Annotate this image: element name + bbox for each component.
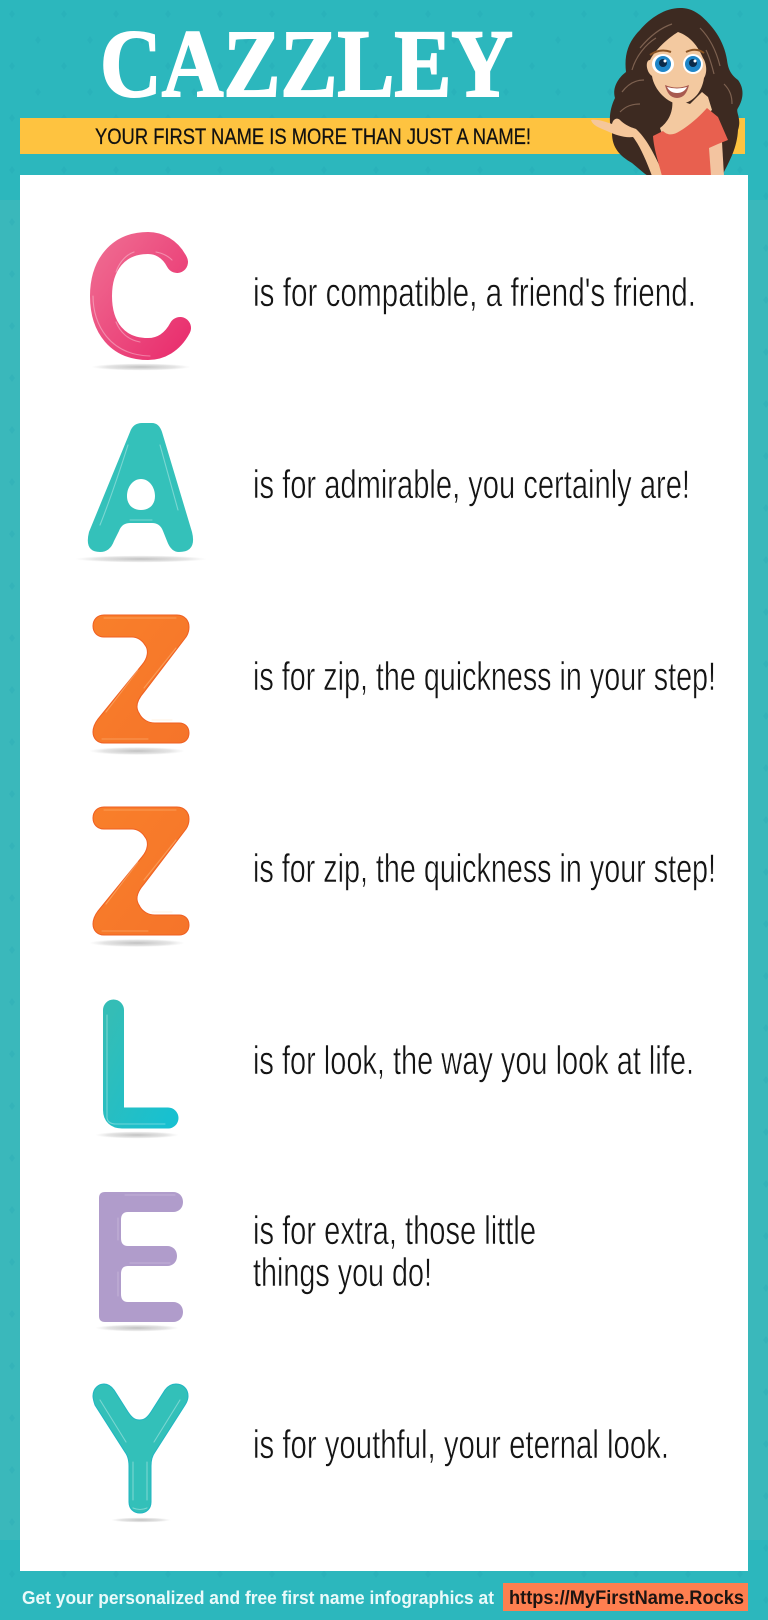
subtitle banner: YOUR FIRST NAME IS MORE THAN JUST A NAME! xyxy=(95,124,531,149)
icon: letter Z xyxy=(89,615,189,755)
row: second letter Z xyxy=(89,807,716,947)
row: letter Z xyxy=(89,615,716,755)
row: letter Y xyxy=(93,1384,669,1522)
row: letter C xyxy=(91,243,696,370)
eyebrows xyxy=(650,50,704,55)
icon: letter L xyxy=(95,1010,179,1138)
smile xyxy=(665,85,689,98)
footer text: Get your personalized and free first name infographics at xyxy=(22,1588,494,1608)
title: CAZZLEY xyxy=(100,10,513,117)
icon: letter A xyxy=(75,423,207,562)
icon: letter E xyxy=(95,1192,183,1332)
text: E: is for extra, those little xyxy=(253,1209,536,1253)
subtitle banner xyxy=(20,118,745,154)
row: letter A xyxy=(75,423,690,562)
icon: letter C xyxy=(91,243,191,370)
icon: letter Y xyxy=(93,1384,188,1522)
text: E xyxy=(253,1209,536,1295)
face xyxy=(647,32,706,104)
right arm xyxy=(708,142,724,176)
text: E: things you do! xyxy=(253,1251,432,1295)
neck xyxy=(660,92,712,136)
arm and hand xyxy=(591,119,664,176)
row: letter L xyxy=(95,1010,694,1138)
icon: letter Z xyxy=(89,807,189,947)
eyes xyxy=(652,54,703,74)
shirt xyxy=(653,108,728,176)
row: letter E xyxy=(95,1192,536,1332)
footer link badge: https://MyFirstName.Rocks xyxy=(509,1588,744,1609)
illustration: woman with long brown hair xyxy=(591,8,742,176)
